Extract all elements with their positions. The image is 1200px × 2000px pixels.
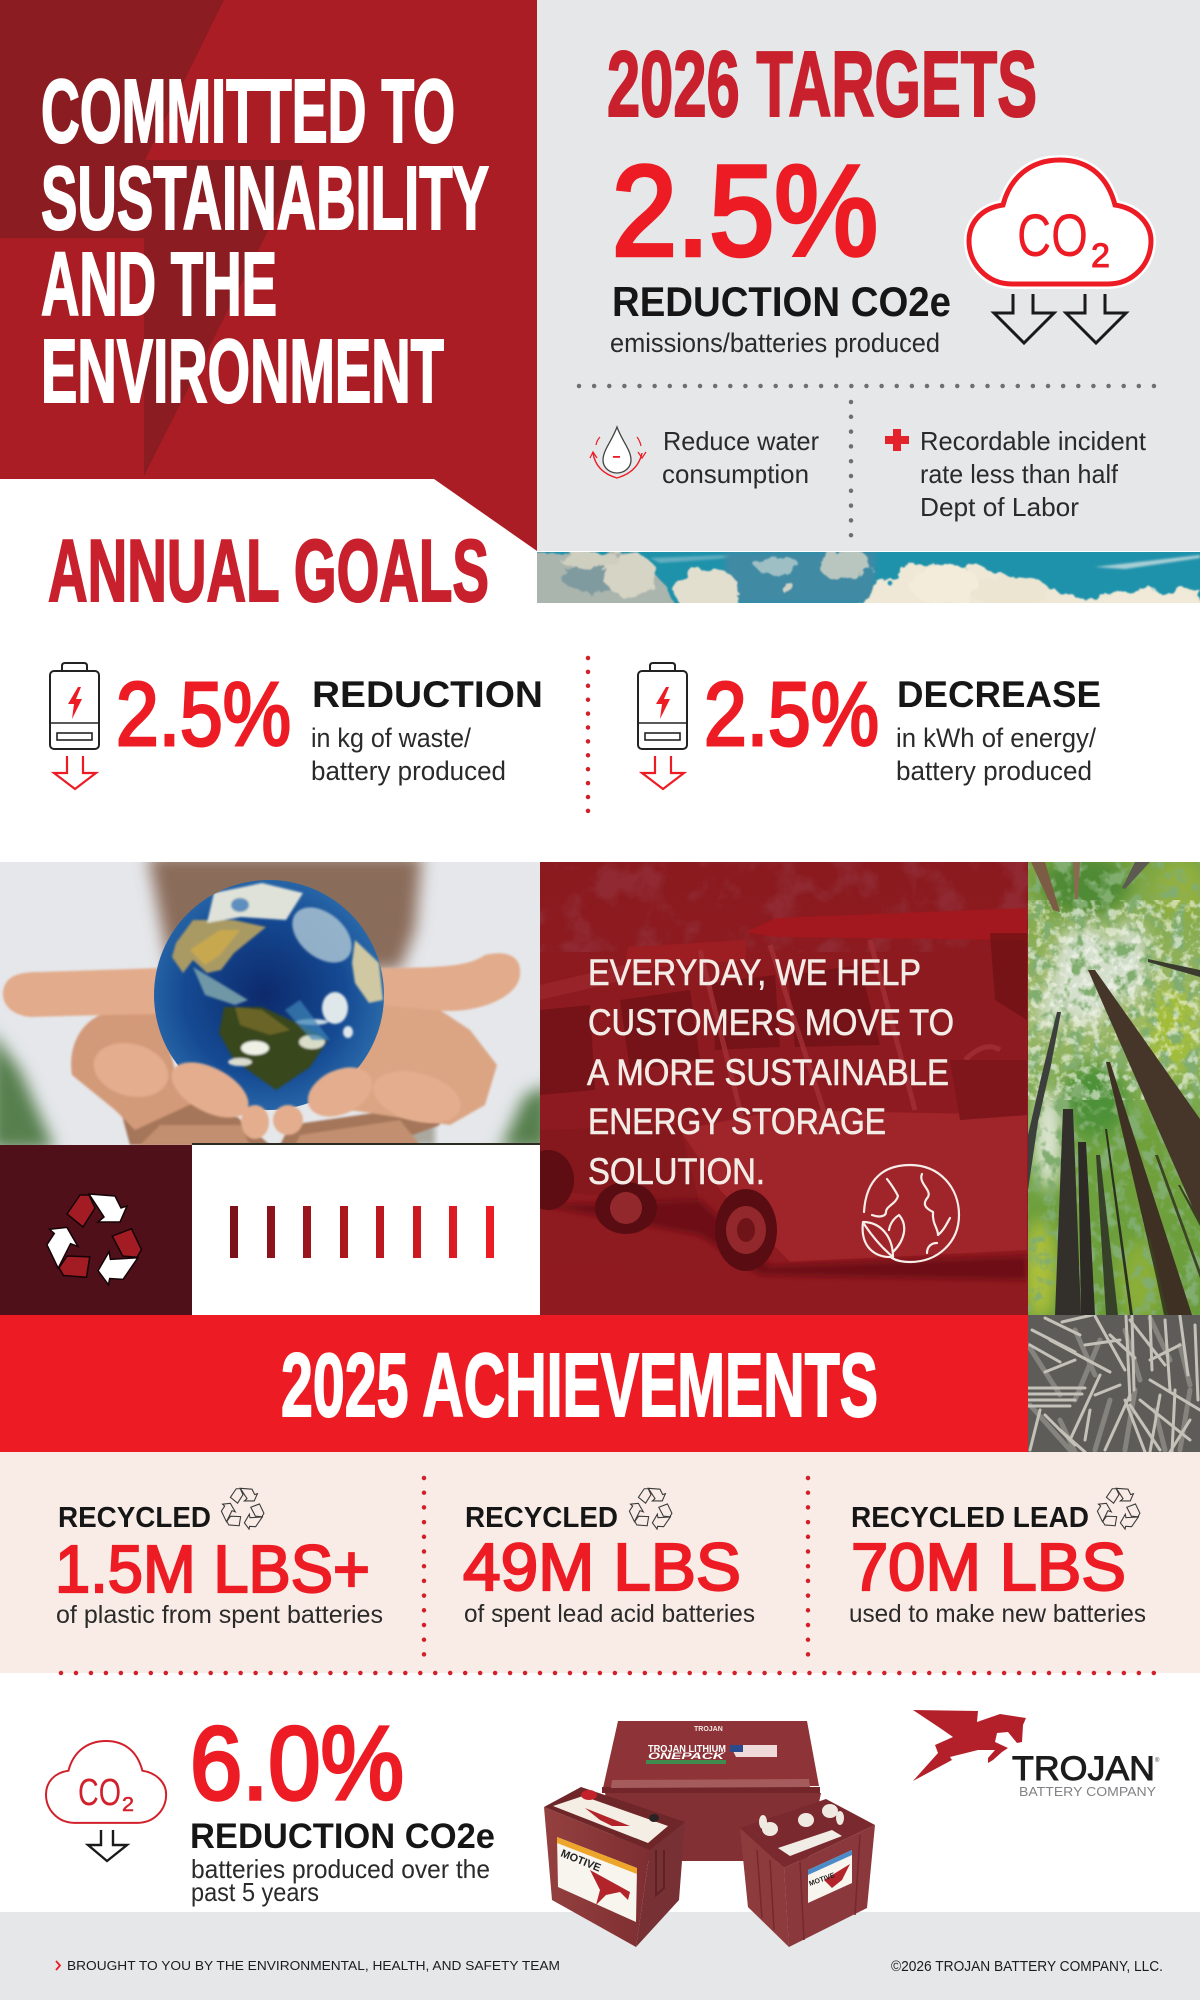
panel: white bars <box>192 1145 540 1315</box>
upper haze puffs <box>756 557 800 575</box>
right thumb <box>380 953 520 1011</box>
heading: 2025 achievements: 2025 ACHIEVEMENTS <box>281 1336 878 1436</box>
footer band <box>0 1912 1200 2000</box>
message text: SOLUTION. <box>588 1151 765 1192</box>
big right cloud <box>858 562 1200 603</box>
photo: redwood forest <box>1024 855 1200 1320</box>
label: reduction co2e: REDUCTION CO2e <box>612 278 951 325</box>
heading: committed to sustainability <box>41 62 489 422</box>
text: reduce water <box>662 426 819 489</box>
stat: lead acid: 49M LBS <box>463 1530 741 1605</box>
heading: committed to sustainability: ENVIRONMENT <box>41 322 444 422</box>
panel: 2026 targets <box>537 0 1200 551</box>
icon: co2 cloud small: CO <box>78 1772 121 1814</box>
left palm <box>71 1012 200 1130</box>
heading: committed to sustainability: AND THE <box>41 235 277 335</box>
fingers <box>88 1035 467 1145</box>
stat: plastic: RECYCLED <box>58 1502 211 1534</box>
vertical red dotted divider <box>586 658 590 812</box>
second puff <box>671 566 741 603</box>
dark underline <box>192 1143 540 1145</box>
trunks <box>1088 970 1200 1224</box>
lithium battery: TROJAN <box>694 1726 723 1733</box>
icon: red plus <box>885 429 909 451</box>
panel: red title block <box>0 0 537 612</box>
horizontal dotted divider <box>579 384 1155 388</box>
panel: 6 percent reduction <box>46 1706 495 1907</box>
dotted column dividers <box>424 1478 808 1658</box>
stat: lead acid: RECYCLED <box>465 1502 618 1534</box>
photo: hands holding globe <box>0 855 550 1150</box>
wheels <box>522 1150 777 1271</box>
text: kg of waste: battery produced <box>311 756 506 786</box>
stat: recycled lead: 70M LBS <box>851 1530 1126 1605</box>
panel: recycling achievements <box>0 1452 1200 1673</box>
text: batteries produced: batteries produced over the <box>191 1854 490 1884</box>
wispy cloud right <box>1095 555 1200 569</box>
text: recordable incident: rate less than half <box>920 459 1119 489</box>
stat: lead acid: of spent lead acid batteries <box>464 1600 755 1628</box>
text: recordable incident: Dept of Labor <box>920 492 1079 522</box>
text: batteries produced <box>191 1854 490 1907</box>
icon: water drop <box>590 427 646 478</box>
text: batteries produced: past 5 years <box>191 1877 319 1907</box>
left mass <box>537 552 676 603</box>
icon: battery down <box>50 663 99 789</box>
banner: 2025 achievements <box>0 1315 1028 1452</box>
icon: co2 cloud: CO <box>1017 202 1088 269</box>
stat: recycled lead <box>849 1488 1146 1628</box>
footer copyright: ©2026 TROJAN BATTERY COMPANY, LLC. <box>891 1958 1163 1975</box>
icon: globe with leaves <box>863 1165 959 1262</box>
left thumb <box>3 968 165 1017</box>
lightning shape <box>0 0 304 476</box>
footer credit: BROUGHT TO YOU BY THE ENVIRONMENTAL, HEALTH, AND SAFETY TEAM <box>67 1958 560 1973</box>
cart roofs <box>746 908 1027 940</box>
icon: recycle outline <box>626 1488 675 1532</box>
icon: recycle outline <box>218 1488 267 1532</box>
stripes <box>230 1206 494 1258</box>
text: kg of waste <box>311 723 506 786</box>
text: kwh of energy: in kWh of energy/ <box>896 723 1096 753</box>
icon: down arrows <box>994 294 1126 343</box>
motive battery right: MOTIVE <box>808 1872 836 1888</box>
stat: plastic: of plastic from spent batteries <box>56 1601 383 1629</box>
message text: ENERGY STORAGE <box>588 1101 886 1142</box>
lithium battery: ONEPACK <box>648 1751 727 1761</box>
vertical dotted divider <box>849 402 853 536</box>
label: reduction co2e: REDUCTION CO2e <box>190 1817 495 1856</box>
photo: recycled fibres <box>1028 1315 1200 1452</box>
icon: co2 cloud small: 2 <box>122 1794 134 1816</box>
chevron <box>56 1961 60 1970</box>
panel: annual goals waste <box>50 663 543 789</box>
motive battery left <box>544 1787 685 1947</box>
stat: plastic: 1.5M LBS+ <box>55 1532 370 1607</box>
number: 2.5 percent: 2.5% <box>612 140 878 283</box>
icon: recycle outline <box>1094 1488 1143 1532</box>
message text <box>587 952 954 1192</box>
number: 2.5 percent waste: 2.5% <box>116 665 291 765</box>
road shadow <box>540 1200 1027 1280</box>
photo: trojan batteries <box>544 1721 875 1947</box>
cart bodies <box>680 1110 1027 1262</box>
text: reduce water: Reduce water <box>663 426 819 456</box>
heading: committed to sustainability: COMMITTED TO <box>41 62 455 162</box>
photo: clouds and sky strip <box>537 552 1200 603</box>
number: 2.5 percent energy: 2.5% <box>704 665 879 765</box>
horizontal red dotted divider <box>61 1671 1155 1675</box>
icon: battery down <box>638 663 687 789</box>
motive battery right <box>740 1799 875 1947</box>
blue hazy centre <box>725 552 875 604</box>
motive battery left: MOTIVE <box>559 1848 602 1875</box>
lithium battery <box>602 1721 821 1861</box>
text: recordable incident: Recordable incident <box>920 426 1147 456</box>
dark under-palm left <box>122 1103 270 1145</box>
white notch behind annual goals <box>0 479 537 612</box>
heading: committed to sustainability: SUSTAINABILITY <box>41 149 489 249</box>
stat: recycled lead: used to make new batteries <box>849 1600 1146 1628</box>
cart windows and cabins <box>540 933 1027 1095</box>
message text: EVERYDAY, WE HELP <box>588 952 921 993</box>
icon: recycle arrows <box>39 1194 148 1291</box>
text: reduce water: consumption <box>662 459 809 489</box>
text: emissions per battery: emissions/batteries produced <box>610 328 940 358</box>
text: recordable incident <box>920 426 1147 522</box>
heading: annual goals: ANNUAL GOALS <box>48 521 489 620</box>
label: reduction: REDUCTION <box>312 674 543 715</box>
message text: CUSTOMERS MOVE TO <box>588 1002 954 1043</box>
wordmark: TROJAN <box>1012 1750 1155 1788</box>
number: 6.0 percent: 6.0% <box>190 1706 404 1822</box>
label: decrease: DECREASE <box>897 674 1101 715</box>
stat: lead acid <box>463 1488 755 1628</box>
pegasus <box>913 1710 1026 1781</box>
logo: trojan battery company <box>913 1710 1160 1799</box>
globe <box>154 880 384 1110</box>
text: kwh of energy: battery produced <box>896 756 1092 786</box>
tagline: BATTERY COMPANY <box>1019 1784 1156 1799</box>
lithium battery: TROJAN LITHIUM <box>648 1744 726 1755</box>
icon: down arrow <box>88 1830 127 1861</box>
panel: annual goals energy <box>638 663 1101 789</box>
icon: co2 cloud <box>969 160 1151 284</box>
registered mark: ® <box>1155 1757 1160 1764</box>
text: kg of waste: in kg of waste/ <box>311 723 471 753</box>
stat: plastic <box>55 1488 383 1629</box>
message text: A MORE SUSTAINABLE <box>587 1052 949 1093</box>
text: kwh of energy <box>896 723 1096 786</box>
stat: recycled lead: RECYCLED LEAD <box>851 1502 1089 1534</box>
right palm <box>350 1000 497 1125</box>
panel: red message with carts <box>522 862 1028 1315</box>
icon: co2 cloud: 2 <box>1091 237 1110 275</box>
icon: co2 cloud small <box>46 1741 166 1823</box>
panel: recycle square <box>0 1145 192 1315</box>
